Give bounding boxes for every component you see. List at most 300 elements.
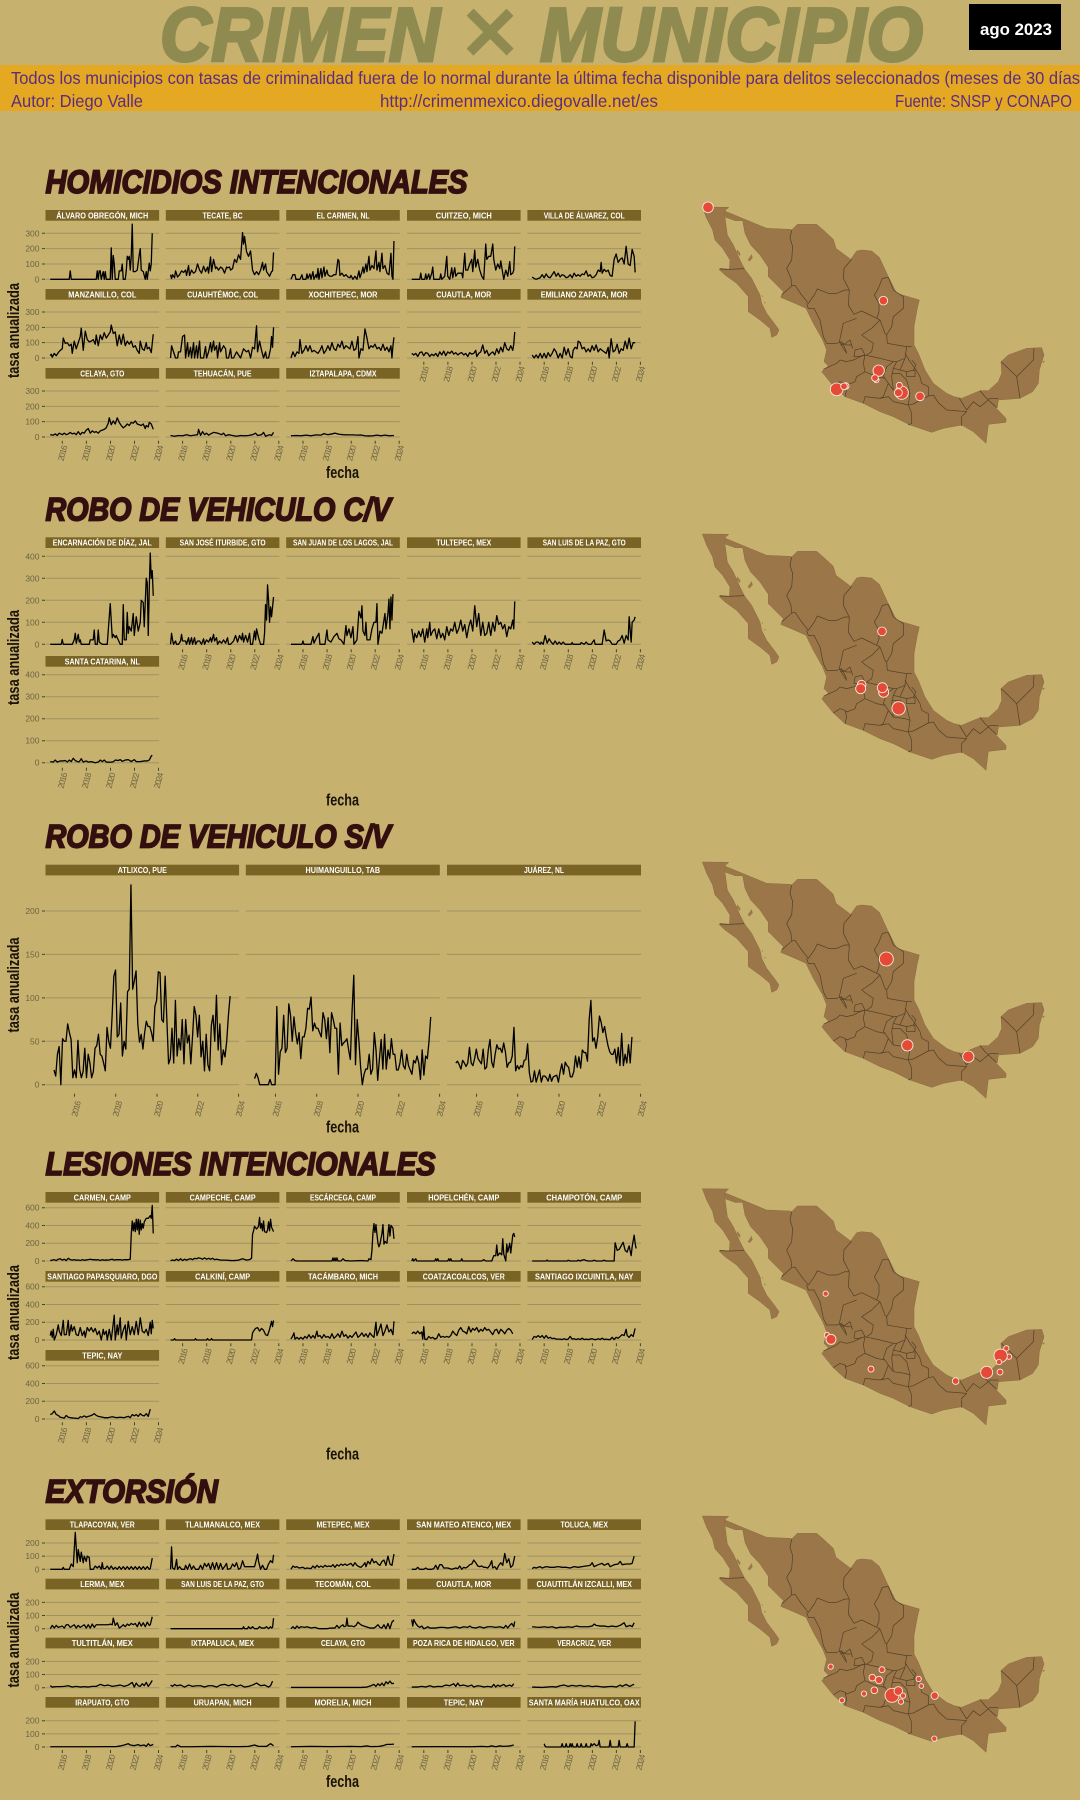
x axis (176, 1343, 286, 1365)
panel: Cuitzeo (407, 210, 521, 279)
x axis: 2020 (224, 444, 238, 462)
y axis: 300 (25, 692, 40, 702)
info band: Autor: Diego Valle (11, 91, 143, 111)
y axis: 400 (25, 1300, 40, 1310)
panel: Atlixco (25, 865, 247, 1118)
strip: Celaya: CELAYA, GTO (80, 369, 124, 378)
x axis: 2020 (586, 1347, 599, 1365)
info band (0, 65, 1080, 111)
x axis: 2020 (224, 1347, 238, 1365)
y axis: 200 (25, 244, 40, 254)
x axis: 2020 (224, 653, 238, 671)
x axis (471, 1094, 649, 1118)
x axis: 2018 (80, 1426, 94, 1444)
x axis: 2022 (610, 1753, 623, 1771)
x axis: 2020 (104, 1753, 118, 1771)
y axis: 200 (25, 906, 40, 916)
x axis: 2022 (610, 1347, 623, 1365)
panel: San Luis de la Paz (166, 1579, 279, 1629)
x axis: 2024 (152, 444, 166, 462)
y axis: 0 (35, 432, 40, 442)
line: San Luis de la Paz (532, 617, 635, 644)
panel: Calkiní (166, 1271, 286, 1365)
panel: Tecate (166, 210, 279, 279)
line: Irapuato (50, 1744, 153, 1747)
strip: Calkiní: CALKINÍ, CAMP (195, 1272, 251, 1281)
panel: Tacámbaro (286, 1271, 406, 1365)
strip: Uruapan: URUAPAN, MICH (194, 1698, 252, 1707)
y axis: 0 (35, 353, 40, 363)
line: Juárez (456, 1000, 632, 1082)
x axis: 2024 (392, 1347, 406, 1365)
y axis (25, 228, 45, 284)
x axis: 2024 (513, 1753, 527, 1771)
line: Ixtapaluca (171, 1681, 273, 1687)
panel: Emiliano Zapata (527, 289, 647, 383)
y axis: 200 (25, 1238, 40, 1248)
x axis: 2022 (489, 1347, 503, 1365)
line: Emiliano Zapata (532, 338, 635, 358)
line: Tepic (412, 1745, 514, 1747)
x axis (296, 441, 406, 462)
x axis: 2022 (128, 1426, 142, 1444)
x axis: 2024 (272, 1753, 286, 1771)
panel: Metepec (286, 1519, 400, 1569)
x axis: 2016 (56, 1753, 70, 1771)
strip: Cuautla: CUAUTLA, MOR (436, 1580, 491, 1589)
x axis: 2024 (272, 444, 286, 462)
line: Santiago Ixcuintla (532, 1328, 635, 1340)
y axis: 100 (25, 417, 40, 427)
line: Tlalmanalco (171, 1547, 274, 1569)
panel: Villa de Álvarez (527, 210, 641, 279)
strip: Metepec: METEPEC, MEX (317, 1521, 370, 1530)
line: Iztapalapa (291, 433, 394, 436)
x axis (538, 362, 647, 383)
strip: Santa Catarina: SANTA CATARINA, NL (65, 657, 140, 666)
panel: Santiago Ixcuintla (527, 1271, 647, 1365)
y axis title: tasa anualizada (4, 283, 23, 378)
x axis: 2024 (392, 653, 406, 671)
map: robo s/v (702, 862, 1045, 1098)
x axis: 2018 (200, 1347, 214, 1365)
x axis: 2020 (344, 653, 358, 671)
x axis: 2024 (513, 365, 527, 383)
panel: Celaya (25, 368, 166, 462)
y axis: 100 (25, 1670, 40, 1680)
panel: San Juan de los Lagos (286, 537, 406, 671)
x axis: 2024 (392, 444, 406, 462)
panel: Celaya (286, 1638, 400, 1688)
y axis (25, 670, 45, 768)
panel: Escárcega (286, 1192, 400, 1261)
panel: Champotón (527, 1192, 641, 1261)
panel: Uruapan (166, 1697, 286, 1771)
date badge: ago 2023 (980, 20, 1052, 39)
section: robo de vehiculo s/v (4, 819, 1045, 1136)
x axis (296, 649, 406, 671)
line: Cuitzeo (412, 244, 515, 279)
x axis: 2022 (368, 1347, 382, 1365)
y axis title: tasa anualizada (4, 937, 23, 1032)
panel: Tepic (407, 1697, 527, 1771)
strip: Veracruz: VERACRUZ, VER (557, 1639, 611, 1648)
strip: Toluca: TOLUCA, MEX (560, 1521, 609, 1530)
x axis: 2018 (441, 1753, 455, 1771)
y axis: 0 (35, 1683, 40, 1693)
line: Huimanguillo (255, 975, 431, 1085)
strip: Hopelchén: HOPELCHÉN, CAMP (428, 1193, 500, 1202)
x axis: 2016 (538, 1347, 551, 1365)
panel: Tecomán (286, 1579, 400, 1629)
strip: Santa María Huatulco: SANTA MARÍA HUATULCO, OAX (529, 1698, 640, 1707)
x axis: 2022 (368, 653, 382, 671)
x axis (417, 649, 527, 671)
strip: Manzanillo: MANZANILLO, COL (68, 290, 136, 299)
line: Tehuacán (171, 429, 274, 436)
x axis: 2024 (272, 653, 286, 671)
line: Santa Catarina (50, 755, 152, 763)
x axis: 2022 (368, 1753, 382, 1771)
y axis: 200 (25, 1716, 40, 1726)
x axis: 2016 (176, 444, 190, 462)
panel: Morelia (286, 1697, 406, 1771)
panel: Hopelchén (407, 1192, 521, 1261)
line: Morelia (291, 1744, 394, 1747)
heading: HOMICIDIOS INTENCIONALES (46, 164, 468, 200)
line: Cuautla (412, 1619, 515, 1629)
section: extorsión (4, 1473, 1045, 1791)
markers: robo s/v (879, 952, 974, 1062)
x axis (538, 1750, 647, 1771)
x axis: 2016 (417, 653, 431, 671)
y axis: 100 (25, 1551, 40, 1561)
strip: Cuitzeo: CUITZEO, MICH (436, 211, 492, 220)
heading: EXTORSIÓN (46, 1473, 219, 1509)
panel: Iztapalapa (286, 368, 406, 462)
strip: Celaya (46, 368, 159, 379)
strip: Celaya: CELAYA, GTO (321, 1639, 365, 1648)
y axis title: tasa anualizada (4, 1592, 23, 1688)
line: Tecomán (291, 1618, 394, 1629)
panel: San Mateo Atenco (407, 1519, 521, 1569)
y axis: 200 (25, 1656, 40, 1666)
y axis: 0 (35, 758, 40, 768)
strip: San Juan de los Lagos: SAN JUAN DE LOS LAGOS, JAL (293, 539, 393, 548)
line: Tultepec (412, 601, 515, 642)
x axis: 2016 (56, 444, 70, 462)
y axis: 200 (25, 322, 40, 332)
y axis (25, 1656, 45, 1693)
panel: El Carmen (286, 210, 400, 279)
panel: San Luis de la Paz (527, 537, 647, 671)
x axis (296, 1750, 406, 1771)
x axis title: fecha (326, 1444, 359, 1464)
x axis title: fecha (326, 463, 359, 482)
x axis: 2020 (586, 365, 599, 383)
y axis (25, 551, 45, 649)
y axis: 100 (25, 993, 40, 1003)
markers: extorsión (828, 1664, 938, 1741)
x axis: 2016 (56, 771, 70, 789)
x axis: 2016 (538, 653, 551, 671)
strip: Coatzacoalcos: COATZACOALCOS, VER (423, 1272, 505, 1281)
y axis: 400 (25, 1220, 40, 1230)
panel: Irapuato (25, 1697, 166, 1771)
strip: Santa Catarina (46, 656, 159, 667)
x axis: 2024 (434, 1099, 448, 1118)
x axis: 2022 (128, 771, 142, 789)
panel: Juárez (447, 865, 649, 1118)
y axis: 400 (25, 670, 40, 680)
line: Tepic (50, 1409, 150, 1419)
strip: San Luis de la Paz: SAN LUIS DE LA PAZ, GTO (543, 539, 626, 548)
y axis: 200 (25, 1317, 40, 1327)
strip: Morelia: MORELIA, MICH (315, 1698, 372, 1707)
line: Celaya (50, 418, 153, 435)
y axis: 100 (25, 259, 40, 269)
panel: Cuautla (407, 289, 527, 383)
x axis: 2022 (393, 1099, 407, 1118)
strip: Tepic: TEPIC, NAY (82, 1351, 123, 1360)
strip: Cuautitlán Izcalli: CUAUTITLÁN IZCALLI, MEX (536, 1580, 633, 1589)
y axis: 0 (35, 1414, 40, 1424)
x axis: 2018 (80, 771, 94, 789)
x axis: 2022 (192, 1099, 206, 1118)
x axis title: fecha (326, 1772, 359, 1791)
strip: Cuautla: CUAUTLA, MOR (436, 290, 491, 299)
x axis: 2016 (296, 653, 310, 671)
y axis (25, 1282, 45, 1345)
x axis: 2020 (554, 1099, 568, 1118)
x axis: 2022 (248, 444, 262, 462)
x axis: 2022 (248, 1347, 262, 1365)
panel: Encarnación de Díaz (25, 537, 159, 649)
strip: Emiliano Zapata: EMILIANO ZAPATA, MOR (541, 290, 628, 299)
line: Tacámbaro (291, 1321, 394, 1339)
y axis: 200 (25, 1538, 40, 1548)
strip: Tecate: TECATE, BC (203, 211, 243, 220)
line: Encarnación de Díaz (50, 553, 153, 644)
x axis (417, 362, 527, 383)
strip: Juárez: JUÁREZ, NL (524, 866, 564, 875)
y axis (25, 307, 45, 363)
x axis: 2020 (465, 1753, 479, 1771)
strip: Tepic: TEPIC, NAY (444, 1698, 484, 1707)
strip: Xochitepec: XOCHITEPEC, MOR (309, 290, 378, 299)
strip: Ixtapaluca: IXTAPALUCA, MEX (191, 1639, 255, 1648)
line: Atlixco (54, 885, 230, 1085)
x axis: 2022 (248, 1753, 262, 1771)
line: Champotón (532, 1235, 636, 1261)
y axis: 50 (30, 1036, 40, 1046)
x axis: 2022 (489, 1753, 503, 1771)
line: Cuautitlán Izcalli (532, 1623, 634, 1628)
y axis: 100 (25, 736, 40, 746)
x axis: 2022 (128, 1753, 142, 1771)
strip: Iztapalapa: IZTAPALAPA, CDMX (310, 369, 377, 378)
y axis: 0 (35, 1624, 40, 1634)
x axis (56, 441, 166, 462)
line: San Juan de los Lagos (291, 594, 393, 644)
line: Calkiní (171, 1320, 274, 1340)
line: San Mateo Atenco (412, 1553, 515, 1569)
strip: Tultitlán: TULTITLÁN, MEX (72, 1639, 133, 1648)
line: Toluca (532, 1556, 634, 1569)
x axis: 2024 (635, 1099, 649, 1118)
strip: El Carmen: EL CARMEN, NL (317, 211, 370, 220)
panel: Manzanillo (25, 289, 159, 363)
x axis (56, 1422, 166, 1444)
x axis: 2024 (272, 1347, 286, 1365)
heading: ROBO DE VEHICULO S/V (46, 819, 393, 855)
y axis: 0 (35, 1742, 40, 1752)
y axis (25, 1597, 45, 1634)
title (160, 0, 923, 85)
strip: Irapuato: IRAPUATO, GTO (75, 1698, 129, 1707)
x axis: 2020 (104, 1426, 118, 1444)
x axis: 2018 (562, 1347, 575, 1365)
x axis: 2018 (80, 444, 94, 462)
strip: Encarnación de Díaz: ENCARNACIÓN DE DÍAZ, JAL (53, 539, 152, 548)
x axis: 2020 (465, 653, 479, 671)
x axis: 2016 (176, 653, 190, 671)
panel: Tultepec (407, 537, 527, 671)
y axis: 0 (35, 1335, 40, 1345)
x axis: 2016 (471, 1099, 485, 1118)
line: Carmen (50, 1205, 153, 1261)
y axis (25, 386, 45, 442)
strip: Santiago Ixcuintla: SANTIAGO IXCUINTLA, NAY (535, 1272, 634, 1281)
panel: Cuautla (407, 1579, 521, 1629)
x axis: 2022 (594, 1099, 608, 1118)
panel: Poza Rica de Hidalgo (407, 1638, 521, 1688)
x axis: 2018 (441, 365, 455, 383)
line: Tultitlán (50, 1680, 152, 1687)
y axis: 0 (35, 639, 40, 649)
panel: Tlapacoyan (25, 1519, 159, 1574)
y axis: 600 (25, 1203, 40, 1213)
strip: Santiago Papasquiaro: SANTIAGO PAPASQUIARO, DGO (47, 1272, 157, 1281)
x axis: 2024 (152, 1426, 166, 1444)
x axis: 2024 (634, 1753, 647, 1771)
y axis (25, 1361, 45, 1424)
line: Metepec (291, 1554, 394, 1569)
line: Villa de Álvarez (532, 246, 635, 279)
strip: Tepic (46, 1350, 159, 1361)
line: Santa María Huatulco (544, 1721, 635, 1747)
strip: Huimanguillo: HUIMANGUILLO, TAB (306, 866, 380, 875)
y axis (25, 1716, 45, 1752)
y axis: 100 (25, 338, 40, 348)
panel: Xochitepec (286, 289, 400, 358)
x axis: 2024 (152, 771, 166, 789)
x axis: 2018 (562, 365, 575, 383)
y axis: 300 (25, 307, 40, 317)
strip: Villa de Álvarez: VILLA DE ÁLVAREZ, COL (544, 211, 625, 220)
date badge (969, 4, 1061, 50)
x axis (176, 1750, 286, 1771)
x axis: 2016 (176, 1347, 190, 1365)
x axis: 2022 (368, 444, 382, 462)
x axis: 2016 (417, 1347, 431, 1365)
strip: Atlixco: ATLIXCO, PUE (118, 866, 167, 875)
line: San José Iturbide (171, 585, 274, 644)
line: Escárcega (291, 1224, 394, 1261)
y axis (25, 1538, 45, 1574)
y axis: 100 (25, 617, 40, 627)
x axis (538, 1343, 647, 1365)
x axis: 2024 (513, 653, 527, 671)
x axis (176, 441, 286, 462)
info band: http://crimenmexico.diegovalle.net/es (380, 91, 658, 111)
y axis: 600 (25, 1361, 40, 1371)
panel: Tehuacán (166, 368, 286, 462)
y axis title: tasa anualizada (4, 1265, 23, 1360)
line: Coatzacoalcos (412, 1327, 513, 1340)
x axis: 2016 (176, 1753, 190, 1771)
panel: Ixtapaluca (166, 1638, 279, 1688)
x axis: 2024 (634, 1347, 647, 1365)
x axis: 2024 (392, 1753, 406, 1771)
y axis: 600 (25, 1282, 40, 1292)
y axis (25, 1203, 45, 1266)
x axis: 2018 (311, 1099, 325, 1118)
map: homicidios (702, 202, 1045, 443)
x axis: 2018 (512, 1099, 526, 1118)
strip: Atlixco (46, 865, 239, 875)
strip: Tehuacán: TEHUACÁN, PUE (194, 369, 252, 378)
y axis title: tasa anualizada (4, 610, 23, 705)
map: robo c/v (702, 534, 1045, 770)
line: Santiago Papasquiaro (50, 1315, 153, 1340)
y axis: 200 (25, 1597, 40, 1607)
heading: ROBO DE VEHICULO C/V (46, 492, 393, 528)
y axis: 0 (35, 274, 40, 284)
y axis: 200 (25, 401, 40, 411)
panel: Carmen (25, 1192, 159, 1266)
y axis: 400 (25, 551, 40, 561)
line: San Luis de la Paz (171, 1618, 274, 1629)
x axis: 2016 (417, 1753, 431, 1771)
x axis: 2018 (320, 653, 334, 671)
strip: Huimanguillo (246, 865, 440, 875)
y axis: 0 (35, 1256, 40, 1266)
panel: Tultitlán (25, 1638, 159, 1693)
panel: Santa Catarina (25, 656, 166, 789)
strip: San Mateo Atenco: SAN MATEO ATENCO, MEX (416, 1521, 512, 1530)
y axis: 100 (25, 1611, 40, 1621)
strip: Lerma: LERMA, MEX (80, 1580, 125, 1589)
x axis: 2020 (586, 1753, 599, 1771)
panel: Lerma (25, 1579, 159, 1634)
strip: Champotón: CHAMPOTÓN, CAMP (546, 1193, 623, 1202)
y axis: 200 (25, 1396, 40, 1406)
line: Lerma (50, 1617, 152, 1629)
strip: Tlapacoyan: TLAPACOYAN, VER (70, 1521, 135, 1530)
panel: Huimanguillo (246, 865, 448, 1118)
section: lesiones intencionales (4, 1146, 1045, 1464)
x axis: 2024 (233, 1099, 247, 1118)
map: extorsión (702, 1516, 1045, 1752)
section: homicidios intencionales (4, 164, 1045, 482)
strip: Tacámbaro: TACÁMBARO, MICH (308, 1272, 378, 1281)
x axis: 2020 (344, 1347, 358, 1365)
y axis: 300 (25, 228, 40, 238)
x axis: 2016 (69, 1099, 83, 1118)
y axis: 100 (25, 1729, 40, 1739)
y axis: 0 (35, 1080, 40, 1090)
